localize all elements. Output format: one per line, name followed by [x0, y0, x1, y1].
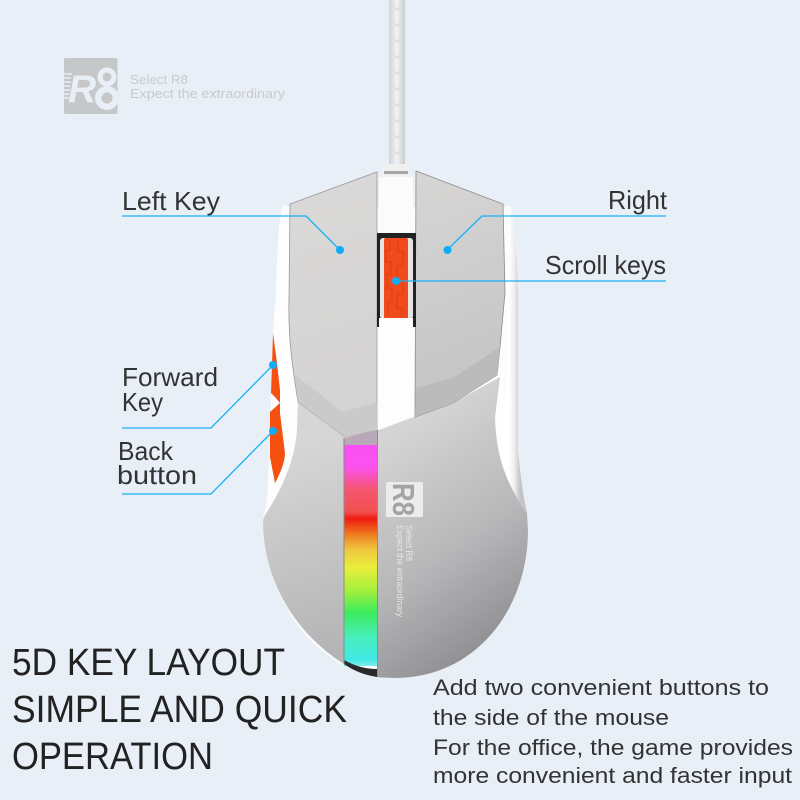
callout: right key	[444, 185, 668, 254]
headline	[12, 642, 347, 778]
headline: SIMPLE AND QUICK	[12, 689, 347, 731]
lower left shell	[263, 402, 345, 664]
brand slogan: Expect the extraordinary	[130, 86, 286, 101]
center strip top	[379, 177, 413, 234]
orange forward and back side buttons	[270, 333, 285, 483]
callout: forward key: Key	[122, 387, 163, 417]
cable	[382, 0, 410, 178]
wheel slot	[377, 233, 416, 327]
left key lower facet	[295, 375, 377, 437]
callout: left key: Left Key	[122, 186, 220, 216]
scroll wheel	[384, 238, 408, 319]
right side shade	[500, 205, 527, 513]
mouse logo: R8	[386, 483, 421, 516]
lower right shell	[377, 377, 528, 678]
callout: right key: Right	[608, 185, 668, 215]
mouse	[263, 171, 528, 678]
callout: forward key	[122, 361, 277, 428]
brand logo	[64, 58, 286, 114]
description text: more convenient and faster input	[433, 763, 792, 788]
center strip bottom	[379, 318, 413, 430]
headline: OPERATION	[12, 736, 213, 778]
description text: Add two convenient buttons to	[433, 675, 769, 700]
description text: the side of the mouse	[433, 705, 669, 730]
callout: forward key: Forward	[122, 362, 218, 392]
callout: back button	[117, 427, 277, 494]
mouse slogan: Select R8	[404, 525, 414, 561]
description text: For the office, the game provides	[433, 735, 793, 760]
callout: left key	[122, 186, 344, 254]
callout: scroll keys	[392, 250, 666, 285]
headline: 5D KEY LAYOUT	[12, 642, 285, 684]
right key	[415, 171, 505, 417]
brand slogan: Select R8	[130, 72, 188, 87]
RGB light strip	[344, 430, 378, 677]
brand logo: R	[68, 68, 96, 111]
description text	[433, 675, 793, 788]
callout: scroll keys: Scroll keys	[545, 250, 666, 280]
callout: back button: button	[117, 460, 197, 490]
callout: back button: Back	[118, 436, 174, 466]
mouse slogan: Expect the extraordinary	[395, 525, 405, 617]
mouse white shell	[263, 205, 528, 678]
left key	[289, 172, 377, 437]
right key lower facet	[415, 347, 500, 417]
